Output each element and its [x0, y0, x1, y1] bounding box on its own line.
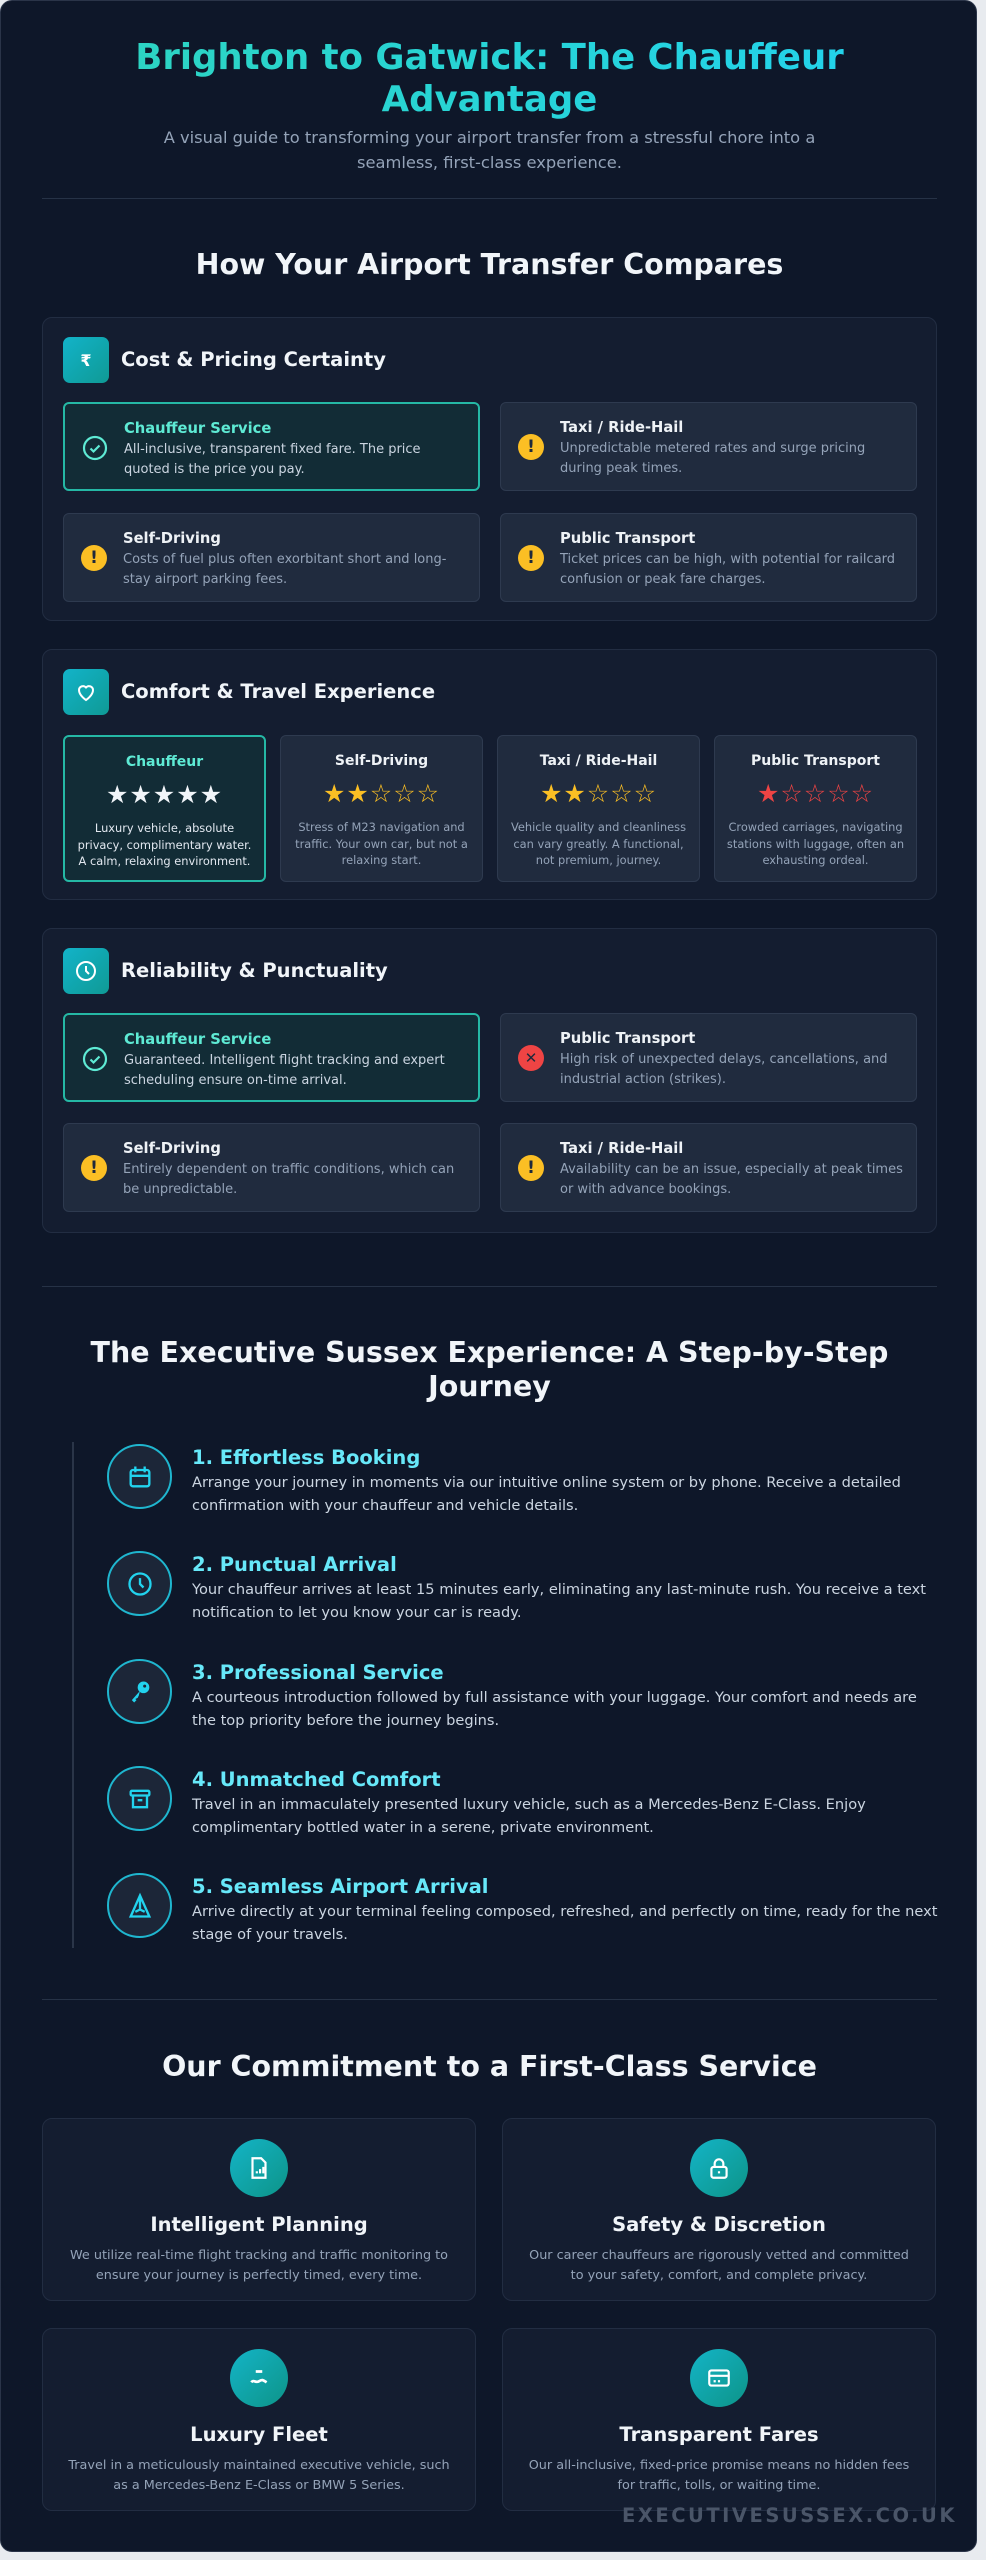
- icon: plane: [107, 1873, 172, 1938]
- icon: heart: [63, 669, 109, 715]
- card: taxi reliability: Availability can be an issue, especially at peak times or with advance bookings.: [560, 1162, 903, 1197]
- card: self-driving cost: [63, 513, 480, 602]
- heading: commitment: Our Commitment to a First-Class Service: [162, 2050, 817, 2083]
- icon: document chart: [230, 2139, 288, 2197]
- card: public transport reliability: ✕: [525, 1049, 537, 1067]
- footer brand: EXECUTIVESUSSEX.CO.UK: [622, 2504, 957, 2527]
- panel: cost & pricing: [42, 317, 937, 621]
- card: self-driving cost: !: [90, 548, 98, 568]
- feature: planning: We utilize real-time flight tracking and traffic monitoring to ensure your journey is perfectly timed, every time.: [70, 2248, 448, 2283]
- step 2: Your chauffeur arrives at least 15 minutes early, eliminating any last-minute rush. You receive a text notification to let you know your car is ready.: [192, 1581, 926, 1620]
- card: public transport reliability: Public Transport: [560, 1030, 695, 1047]
- rating: chauffeur: Luxury vehicle, absolute privacy, complimentary water. A calm, relaxing environment.: [78, 821, 251, 868]
- rating: chauffeur: ★★★★★: [106, 780, 223, 809]
- icon: pricing: ₹: [80, 350, 92, 370]
- card: taxi reliability: [500, 1123, 917, 1212]
- rating: public transport: ★☆☆☆☆: [757, 779, 874, 808]
- card: self-driving reliability: !: [90, 1158, 98, 1178]
- rating: taxi: ★★☆☆☆: [540, 779, 657, 808]
- feature: fares: Our all-inclusive, fixed-price promise means no hidden fees for traffic, tolls, or waiting time.: [529, 2458, 909, 2493]
- feature: planning: [42, 2118, 476, 2301]
- card: self-driving reliability: [63, 1123, 480, 1212]
- rating: taxi: [497, 735, 700, 882]
- step 5: Arrive directly at your terminal feeling composed, refreshed, and perfectly on time, ready for the next stage of your travels.: [192, 1903, 937, 1942]
- rating: chauffeur: Chauffeur: [126, 754, 203, 770]
- card: self-driving cost: Costs of fuel plus often exorbitant short and long-stay airport parking fees.: [123, 552, 446, 587]
- subtitle: A visual guide to transforming your airport transfer from a stressful chore into a seamless, first-class experience.: [164, 128, 815, 172]
- icon: key: [107, 1659, 172, 1724]
- card: taxi cost: [500, 402, 917, 491]
- card: taxi reliability: Taxi / Ride-Hail: [560, 1140, 683, 1157]
- rating: public transport: [714, 735, 917, 882]
- rating: self-driving: ★★☆☆☆: [323, 779, 440, 808]
- feature: fleet: [42, 2328, 476, 2511]
- card: chauffeur reliability: Chauffeur Service: [124, 1031, 271, 1048]
- card: public transport cost: !: [527, 548, 535, 568]
- feature: safety: Our career chauffeurs are rigorously vetted and committed to your safety, comfort, and complete privacy.: [529, 2248, 909, 2283]
- card: self-driving cost: Self-Driving: [123, 530, 221, 547]
- card: self-driving reliability: Entirely dependent on traffic conditions, which can be unpredictable.: [123, 1162, 454, 1197]
- rating: self-driving: [280, 735, 483, 882]
- card: chauffeur reliability: [63, 1013, 480, 1102]
- icon: pricing: [63, 337, 109, 383]
- step 2: 2. Punctual Arrival: [192, 1553, 397, 1576]
- rating: taxi: Taxi / Ride-Hail: [540, 753, 657, 769]
- card: public transport reliability: High risk of unexpected delays, cancellations, and industrial action (strikes).: [560, 1052, 888, 1087]
- feature: fares: Transparent Fares: [619, 2423, 819, 2446]
- step 4: 4. Unmatched Comfort: [192, 1768, 441, 1791]
- title: Brighton to Gatwick: The Chauffeur Advantage: [135, 37, 844, 120]
- card: chauffeur cost: All-inclusive, transparent fixed fare. The price quoted is the price you pay.: [124, 442, 421, 477]
- rating: self-driving: Self-Driving: [335, 753, 428, 769]
- icon: clock: [107, 1551, 172, 1616]
- panel heading: comfort: Comfort & Travel Experience: [121, 680, 435, 703]
- step 3: 3. Professional Service: [192, 1661, 444, 1684]
- step 3: [107, 1659, 917, 1728]
- card: taxi reliability: !: [527, 1158, 535, 1178]
- card: taxi cost: Unpredictable metered rates and surge pricing during peak times.: [560, 441, 865, 476]
- card: public transport reliability: [500, 1013, 917, 1102]
- step 1: 1. Effortless Booking: [192, 1446, 420, 1469]
- card: chauffeur cost: Chauffeur Service: [124, 420, 271, 437]
- step 5: 5. Seamless Airport Arrival: [192, 1875, 488, 1898]
- feature: planning: Intelligent Planning: [150, 2213, 368, 2236]
- card: chauffeur reliability: Guaranteed. Intelligent flight tracking and expert scheduling ensure on-time arrival.: [124, 1053, 445, 1088]
- panel: reliability: [42, 928, 937, 1233]
- card: public transport cost: Ticket prices can be high, with potential for railcard confusion or peak fare charges.: [560, 552, 895, 587]
- step 4: [107, 1766, 866, 1836]
- icon: card: [690, 2349, 748, 2407]
- feature: safety: [502, 2118, 936, 2301]
- card: taxi cost: Taxi / Ride-Hail: [560, 419, 683, 436]
- icon: calendar: [107, 1444, 172, 1509]
- feature: fleet: Luxury Fleet: [190, 2423, 328, 2446]
- icon: box: [107, 1766, 172, 1831]
- card: self-driving reliability: Self-Driving: [123, 1140, 221, 1157]
- panel heading: reliability: Reliability & Punctuality: [121, 959, 388, 982]
- heading: compares: How Your Airport Transfer Compares: [196, 248, 783, 281]
- heading: journey: The Executive Sussex Experience: A Step-by-Step Journey: [91, 1336, 888, 1403]
- step 1: Arrange your journey in moments via our intuitive online system or by phone. Receive a detailed confirmation with your chauffeur and vehicle details.: [192, 1474, 901, 1514]
- rating: public transport: Crowded carriages, navigating stations with luggage, often an exhausting ordeal.: [727, 820, 904, 867]
- step 5: [107, 1873, 938, 1942]
- step 2: [107, 1551, 926, 1620]
- icon: clock: [63, 948, 109, 994]
- step 1: [107, 1444, 901, 1514]
- rating: public transport: Public Transport: [751, 753, 880, 769]
- card: chauffeur cost: [63, 402, 480, 491]
- card: taxi cost: !: [527, 437, 535, 457]
- step 3: A courteous introduction followed by full assistance with your luggage. Your comfort and needs are the top priority before the journey begins.: [192, 1689, 917, 1728]
- panel: comfort: [42, 649, 937, 900]
- icon: lock: [690, 2139, 748, 2197]
- icon: car: [230, 2349, 288, 2407]
- feature: fleet: Travel in a meticulously maintained executive vehicle, such as a Mercedes-Benz E-Class or BMW 5 Series.: [68, 2458, 450, 2493]
- panel heading: cost: Cost & Pricing Certainty: [121, 348, 386, 371]
- feature: safety: Safety & Discretion: [612, 2213, 826, 2236]
- rating: self-driving: Stress of M23 navigation and traffic. Your own car, but not a relaxing start.: [295, 820, 468, 867]
- rating: taxi: Vehicle quality and cleanliness can vary greatly. A functional, not premium, journey.: [511, 820, 686, 867]
- timeline line: [72, 1442, 74, 1948]
- feature: fares: [502, 2328, 936, 2511]
- rating: chauffeur: [63, 735, 266, 882]
- step 4: Travel in an immaculately presented luxury vehicle, such as a Mercedes-Benz E-Class. Enjoy complimentary bottled water in a serene, private environment.: [192, 1796, 866, 1836]
- card: public transport cost: [500, 513, 917, 602]
- card: public transport cost: Public Transport: [560, 530, 695, 547]
